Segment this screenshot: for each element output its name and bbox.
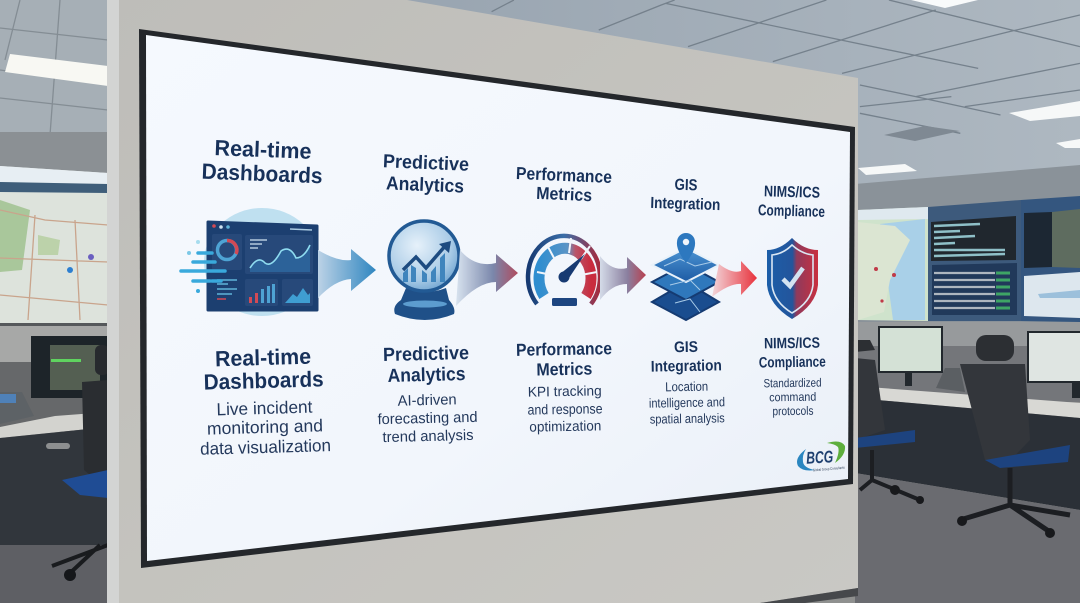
wall screen surface <box>146 35 850 561</box>
arrow: dashboard to predictive <box>318 249 376 298</box>
column: GIS Integration description: Integration <box>651 357 722 376</box>
central wall carrying the screen <box>107 0 858 603</box>
wall screen frame <box>139 29 855 568</box>
right room region <box>855 165 1080 603</box>
column: Predictive Analytics description: Predictive <box>383 343 469 366</box>
column: GIS Integration description: intelligence and <box>649 394 725 411</box>
icon: shield with check <box>767 238 818 319</box>
desk <box>0 412 108 438</box>
arrow: gis to compliance <box>712 261 757 297</box>
heading: Performance Metrics <box>515 163 613 206</box>
column: Performance Metrics description <box>516 338 614 435</box>
speed lines <box>181 253 225 281</box>
column: Performance Metrics description: optimization <box>529 417 601 435</box>
column: Predictive Analytics description: Analytics <box>387 364 466 387</box>
heading: NIMS/ICS Compliance: NIMS/ICS <box>764 183 820 202</box>
column: GIS Integration description <box>648 338 725 427</box>
column: Predictive Analytics description: trend analysis <box>382 427 474 446</box>
column: Performance Metrics description: and response <box>527 400 603 418</box>
column: Real-time Dashboards description: data visualization <box>200 435 331 459</box>
column: NIMS/ICS Compliance description: Compliance <box>759 354 826 371</box>
ceiling lights <box>911 0 978 8</box>
heading: Predictive Analytics <box>382 151 469 198</box>
left chair <box>46 345 109 581</box>
column: Performance Metrics description: KPI tracking <box>528 382 602 400</box>
column: Performance Metrics description: Performance <box>516 338 612 360</box>
column: Predictive Analytics description <box>376 343 478 446</box>
column: GIS Integration description: GIS <box>674 339 698 356</box>
right phone and keyboard <box>936 368 965 392</box>
heading: Performance Metrics: Metrics <box>536 183 593 205</box>
icon: GIS map layers with pin <box>652 233 719 320</box>
heading: Real-time Dashboards <box>201 135 324 188</box>
heading: GIS Integration: GIS <box>674 177 698 194</box>
column: Real-time Dashboards description: Real-time <box>215 344 311 371</box>
column: NIMS/ICS Compliance description: Standardized <box>763 376 822 390</box>
left wall map display <box>0 166 108 323</box>
right monitors <box>878 326 1080 398</box>
column: GIS Integration description: Location <box>665 379 708 394</box>
heading: Predictive Analytics: Predictive <box>383 151 469 176</box>
heading: NIMS/ICS Compliance: Compliance <box>758 202 825 221</box>
logo: BCG: BCG <box>806 447 834 468</box>
arrow: performance to gis <box>600 256 646 300</box>
ceiling vent <box>884 126 960 141</box>
column: Performance Metrics description: Metrics <box>536 359 593 379</box>
heading: Predictive Analytics: Analytics <box>386 173 464 198</box>
column: Real-time Dashboards description: monitoring and <box>207 415 323 439</box>
icon: crystal ball <box>389 221 459 320</box>
left monitor <box>31 336 107 398</box>
column: Predictive Analytics description: forecasting and <box>377 409 478 428</box>
right desk <box>855 386 1080 418</box>
left room region <box>0 0 109 603</box>
arrow: predictive to performance <box>456 250 518 306</box>
right chairs <box>855 335 1070 538</box>
column: NIMS/ICS Compliance description <box>758 335 827 418</box>
column: NIMS/ICS Compliance description: protocols <box>772 404 814 418</box>
heading: NIMS/ICS Compliance <box>758 183 826 221</box>
ceiling behind the wall <box>380 0 1080 190</box>
icon: dashboard <box>181 208 320 316</box>
column: Predictive Analytics description: AI-driven <box>397 391 457 410</box>
column: NIMS/ICS Compliance description: NIMS/ICS <box>764 335 820 352</box>
logo: BCG <box>797 442 845 472</box>
column: Real-time Dashboards description: Live incident <box>216 397 313 419</box>
column: NIMS/ICS Compliance description: command <box>769 390 816 404</box>
desk phone <box>0 392 34 424</box>
heading: Real-time Dashboards: Real-time <box>214 135 312 164</box>
column: Real-time Dashboards description: Dashboards <box>203 366 324 395</box>
icon: speedometer gauge <box>528 236 600 306</box>
right map display <box>858 207 928 321</box>
ceiling light <box>5 54 108 86</box>
heading: Performance Metrics: Performance <box>516 163 613 187</box>
heading: GIS Integration: Integration <box>650 195 721 214</box>
logo: BCG: Global Group Consultants <box>813 466 845 472</box>
right data display <box>928 200 1021 321</box>
heading: Real-time Dashboards: Dashboards <box>201 159 323 188</box>
column: GIS Integration description: spatial analysis <box>650 410 725 427</box>
column: Real-time Dashboards description <box>197 343 331 459</box>
heading: GIS Integration <box>650 176 721 214</box>
far right displays <box>1021 196 1080 322</box>
